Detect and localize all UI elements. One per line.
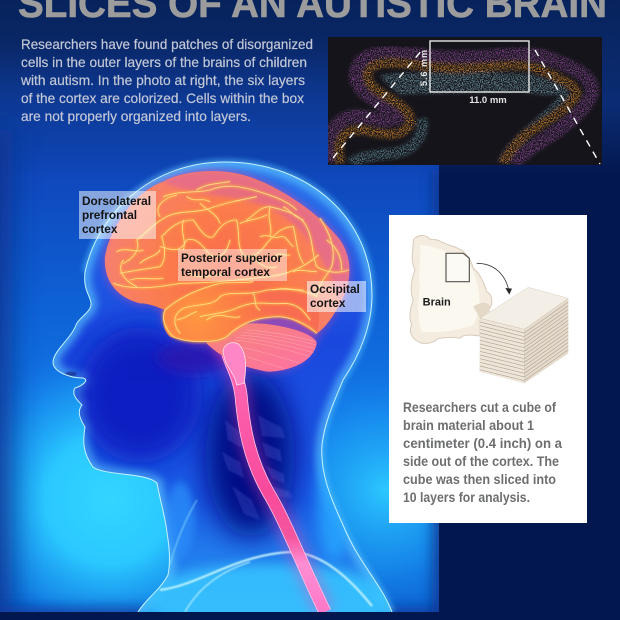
neck shadow (206, 373, 294, 537)
purple outer layer (329, 52, 592, 163)
gyri lines (113, 182, 348, 342)
arrow (477, 263, 509, 290)
card description: Researchers cut a cube of (403, 399, 556, 415)
gyri glow (113, 182, 348, 342)
label: posterior superior temporal cortex: temporal cortex (181, 265, 270, 279)
inner rim glow (53, 162, 392, 612)
nostril (65, 372, 77, 376)
intro text block: of the cortex are colorized. Cells within the box (21, 90, 304, 106)
label: dorsolateral prefrontal cortex (79, 191, 156, 239)
card description: 10 layers for analysis. (403, 489, 530, 505)
cube cut square (446, 253, 469, 282)
intro text block: with autism. In the photo at right, the six layers (20, 72, 305, 88)
intro text block: cells in the outer layers of the brains of children (21, 54, 307, 70)
brain glow (105, 171, 349, 372)
label: dorsolateral prefrontal cortex: Dorsolateral (82, 194, 151, 208)
head outline (53, 162, 392, 612)
width label: 11.0 mm (469, 95, 507, 106)
label: dorsolateral prefrontal cortex: cortex (82, 222, 118, 236)
photo: colorized cortex (328, 37, 602, 165)
shoulder glow (145, 564, 395, 620)
brainstem bulb (223, 343, 246, 385)
intro text block: are not properly organized into layers. (21, 108, 251, 124)
icon: brain with cube cut and slices (410, 236, 568, 383)
dashed guide lines (333, 50, 600, 164)
lower-brain shadow (157, 342, 233, 374)
cerebellum (207, 323, 317, 372)
intro text block (20, 36, 313, 124)
brain label: Brain (423, 296, 451, 308)
panel: head and brain illustration (0, 54, 439, 612)
vertebrae (222, 415, 292, 520)
label: posterior superior temporal cortex (178, 249, 287, 281)
cerebrum (105, 171, 349, 342)
neck highlight streak (170, 500, 197, 565)
label: occipital cortex: Occipital (310, 282, 360, 296)
brain chunk (410, 236, 492, 343)
head outer halo (85, 162, 392, 612)
front-of-neck light (166, 482, 194, 558)
label: occipital cortex: cortex (310, 296, 346, 310)
label: occipital cortex (307, 281, 366, 312)
slice stack (479, 287, 568, 383)
face shadow (78, 327, 202, 463)
height label: 5.6 mm (419, 50, 429, 86)
card description: centimeter (0.4 inch) on a (403, 435, 562, 451)
panel: cube slicing card (389, 215, 587, 523)
card description: cube was then sliced into (403, 471, 556, 487)
shoulder lines (160, 552, 372, 606)
orange layer (339, 63, 577, 163)
intro text block: Researchers have found patches of disorganized (21, 36, 313, 52)
spinal cord (226, 345, 325, 612)
back-of-neck light (317, 440, 353, 560)
measurement box (430, 41, 529, 92)
card description: side out of the cortex. The (403, 453, 559, 469)
brain (105, 171, 349, 385)
top lobes tint (163, 171, 349, 303)
card description: brain material about 1 (403, 417, 534, 433)
temporal lobe (163, 283, 319, 342)
label: posterior superior temporal cortex: Posterior superior (181, 251, 282, 265)
card description (403, 399, 562, 505)
head silhouette (40, 150, 400, 620)
teal inner layer (380, 72, 568, 95)
label: dorsolateral prefrontal cortex: prefrontal (82, 208, 137, 222)
